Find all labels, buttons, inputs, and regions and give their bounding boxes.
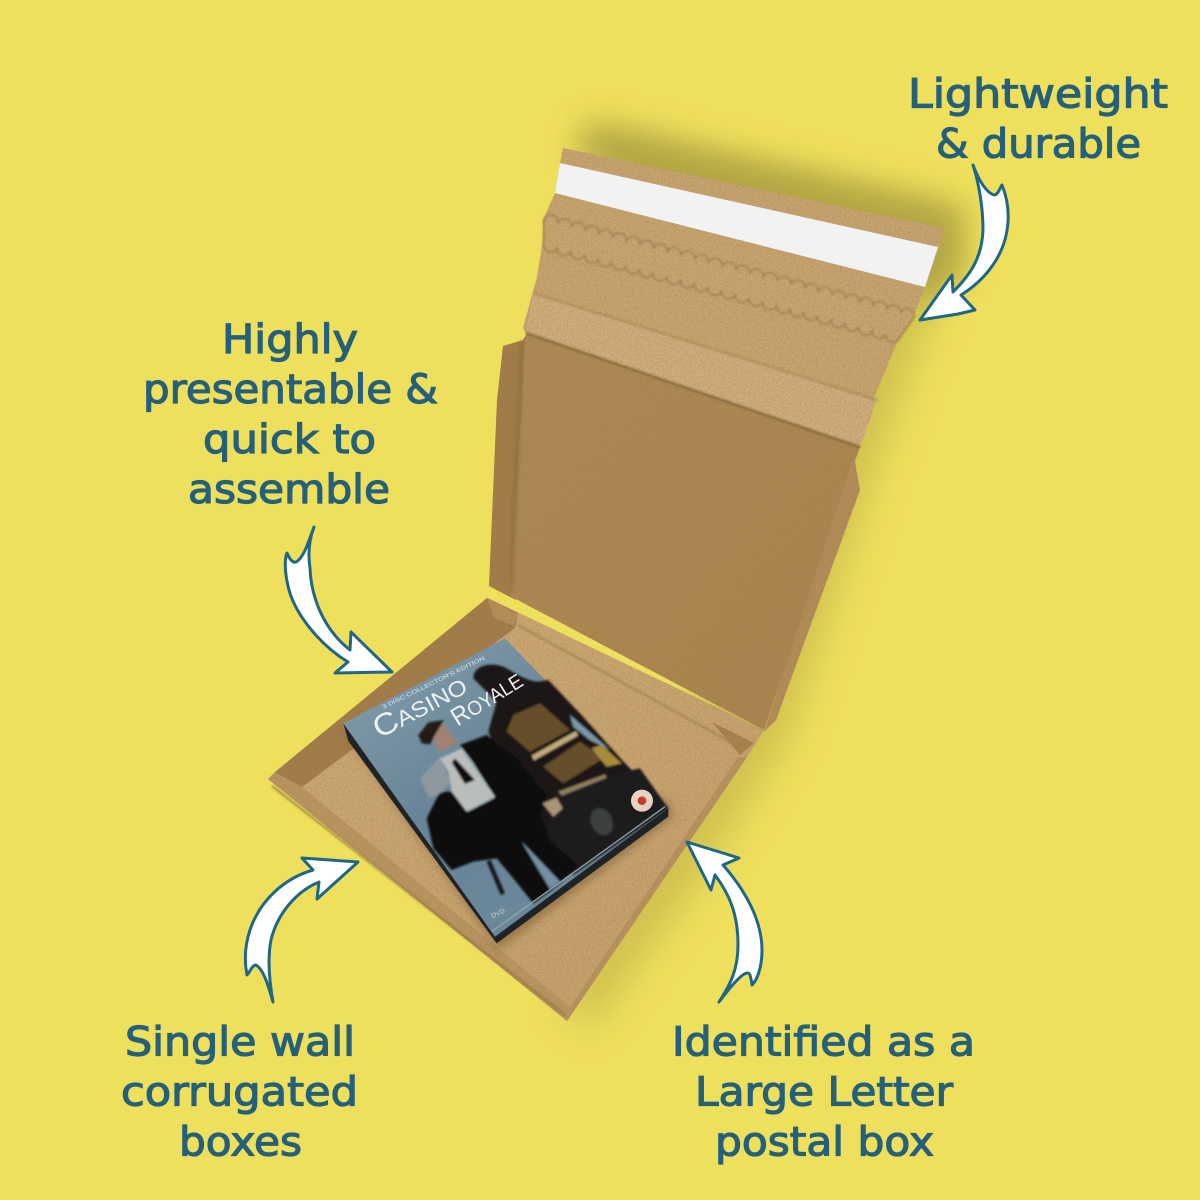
callout: highly presentable: Highly: [222, 317, 358, 363]
case cover: [343, 638, 668, 937]
callout: single wall corrugated: boxes: [179, 1120, 302, 1166]
callout: large letter postal box: [672, 1020, 975, 1166]
cover: sliver between legs: [522, 842, 560, 889]
rip strip band: [544, 215, 914, 342]
cover: age rating sticker: [631, 790, 653, 812]
cover: man's hair: [418, 720, 444, 744]
cover: canopy light bar: [532, 731, 578, 760]
corner tab at back: [487, 598, 518, 626]
callout: lightweight and durable: & durable: [936, 122, 1141, 168]
white adhesive strip: [555, 163, 938, 287]
callout: lightweight and durable: Lightweight: [908, 72, 1168, 118]
lid interior panel: [510, 333, 860, 730]
callout: single wall corrugated: [121, 1020, 358, 1166]
DVD case: [343, 638, 673, 950]
fold band upper crease: [533, 293, 877, 400]
callout: large letter postal box: Identified as a: [672, 1020, 975, 1066]
cover: hand: [543, 798, 563, 817]
case shadow: [343, 730, 673, 950]
drop shadow behind box: [560, 122, 965, 1030]
cover: car roof highlight: [558, 774, 607, 796]
callout: highly presentable: assemble: [188, 467, 390, 513]
case spine: [343, 723, 668, 943]
cover: bright window lights: [592, 745, 622, 767]
cover artwork: [418, 665, 668, 903]
top closing flap: [523, 148, 943, 447]
cover: title CASINO: CASINO: [367, 667, 472, 745]
cover: DVD logo: DVD: [491, 908, 506, 920]
arrow: to top flap: [920, 165, 1008, 320]
fold band: [526, 293, 877, 447]
arrow: to tray right edge: [687, 842, 762, 1002]
cover: man in black suit: [427, 735, 578, 903]
cover: gold casino windows: [507, 703, 603, 783]
corner tab at right: [712, 722, 754, 755]
callout: highly presentable: presentable &: [143, 367, 438, 413]
lid top fold line: [526, 333, 860, 447]
front thick folded edge: [268, 772, 570, 1021]
callout: lightweight and durable: [908, 72, 1168, 168]
right folded edge: [567, 757, 747, 1021]
callout: large letter postal box: postal box: [715, 1120, 934, 1166]
cover: series line: 3 DISC COLLECTOR'S EDITION: [382, 656, 486, 711]
cover: car body: [547, 768, 668, 875]
right side flap of lid: [764, 456, 860, 732]
lid left crease: [511, 342, 522, 592]
cover: dark building backdrop: [473, 665, 668, 882]
arrow: to tray back edge: [285, 527, 392, 673]
tray floor and walls: [268, 598, 764, 1021]
cover: collar: [420, 757, 450, 798]
callout: single wall corrugated: Single wall: [125, 1020, 355, 1066]
callout: highly presentable: quick to: [203, 417, 376, 463]
cover: pale sky sliver: [570, 715, 610, 750]
cover: gun: [487, 860, 505, 895]
cover: lower edge highlight: [492, 807, 665, 932]
arrow: to tray front edge: [245, 858, 358, 1002]
cover: title ROYALE: ROYALE: [446, 666, 528, 732]
cover: car grille: [586, 804, 617, 839]
front edge fold line: [272, 786, 565, 1015]
back wall of tray: [275, 598, 518, 787]
tray base: [268, 598, 764, 1021]
cover: man's face: [432, 723, 457, 752]
callout: highly presentable: [143, 317, 438, 513]
callout: single wall corrugated: corrugated: [121, 1070, 358, 1116]
product: open cardboard box: [268, 148, 943, 1021]
left side flap of lid: [489, 333, 527, 600]
crease line across tray floor: [518, 625, 736, 745]
callout: large letter postal box: Large Letter: [695, 1070, 954, 1116]
cover: bow tie: [452, 758, 475, 784]
cover: white shirt and scarf: [440, 748, 495, 812]
